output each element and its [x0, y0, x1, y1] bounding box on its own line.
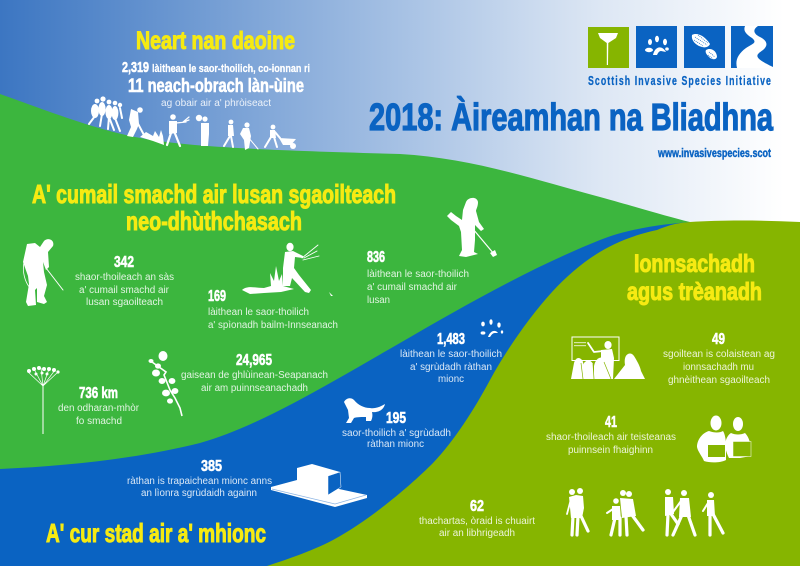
text: 62 events: thachartas, òraid is chuairt — [419, 516, 535, 527]
icon: giant hogweed — [27, 366, 60, 434]
text: 836 days: làithean le saor-thoilich — [367, 269, 469, 280]
text: 342 volunteers — [75, 254, 174, 308]
text: 385 rafts and traps: ràthan is trapaichean mionc anns — [127, 476, 272, 487]
text: 195 volunteers: 195 — [386, 410, 406, 427]
text: 41 certificates: shaor-thoileach air teisteanas — [546, 432, 676, 443]
heading: Neart nan daoine: Neart nan daoine — [136, 27, 295, 55]
panel: blue mink band — [0, 222, 690, 566]
logo tile: paw — [636, 26, 677, 68]
text: working on project: ag obair air a' phròiseact — [161, 98, 271, 109]
text: 836 days: a' cumail smachd air — [367, 282, 458, 293]
icon: knotweed sprig — [148, 351, 182, 416]
text: 49 schools: 49 — [712, 331, 725, 348]
text: 342 volunteers: shaor-thoileach an sàs — [75, 272, 174, 283]
logo: Scottish Invasive Species Initiative — [588, 26, 773, 88]
text: 836 days — [367, 249, 469, 306]
text: 62 events: air an libhrigeadh — [439, 528, 515, 539]
heading: controlling invasive plants — [32, 179, 396, 236]
text: 736 km: den odharan-mhòr — [58, 403, 140, 414]
text: 41 certificates — [546, 414, 676, 456]
text: 736 km: fo smachd — [76, 416, 122, 427]
text: 342 volunteers: lusan sgaoilteach — [86, 297, 163, 308]
text: 62 events — [419, 498, 535, 539]
text: 1,483 days: 1,483 — [437, 331, 465, 348]
text: 24,965 stems: air am puinnseanachadh — [201, 383, 308, 394]
heading: learning and training: agus trèanadh — [627, 278, 762, 306]
text: full-time staff equivalent: 11 neach-obrach làn-ùine — [128, 76, 304, 97]
text: 169 balsam days: 169 — [208, 288, 226, 305]
text: 1,483 days: mionc — [438, 374, 464, 385]
text: 62 events: 62 — [470, 498, 484, 515]
text: 41 certificates: puinnsein fhaighinn — [568, 445, 653, 456]
text: 49 schools: ionnsachadh mu — [683, 362, 754, 373]
icon: walking groups — [567, 488, 723, 535]
text: 836 days: lusan — [367, 295, 390, 306]
heading: stopping the mink: A' cur stad air a' mhionc — [46, 518, 266, 548]
logo tile: river — [731, 26, 773, 68]
text: 1,483 days: a' sgrùdadh ràthan — [410, 362, 492, 373]
text: 24,965 stems: 24,965 — [236, 352, 272, 369]
text: 195 volunteers: ràthan mionc — [367, 439, 424, 450]
icon: strimmer worker — [447, 198, 497, 257]
text: 195 volunteers: saor-thoilich a' sgrùdadh — [342, 428, 451, 439]
text: 24,965 stems: gaisean de ghlùinean-Seapanach — [181, 370, 328, 381]
text: 1,483 days: làithean le saor-thoilich — [400, 349, 502, 360]
text: 49 schools — [663, 331, 775, 386]
panel: green invasive plants hill — [0, 94, 690, 566]
icon: row of volunteers on hill — [89, 96, 296, 150]
text: 41 certificates: 41 — [605, 414, 617, 431]
logo tile: boot print — [684, 26, 725, 68]
text: 385 rafts and traps — [127, 458, 272, 499]
text: 836 days: 836 — [367, 249, 385, 266]
text: volunteer days — [122, 59, 310, 76]
icon: paw print — [481, 319, 503, 337]
icon: mink raft and trap — [271, 464, 367, 507]
text: 24,965 stems — [181, 352, 328, 394]
text: volunteer days: 2,319 — [122, 59, 149, 76]
icon: two people with certificates — [697, 416, 751, 462]
icon: classroom — [571, 337, 645, 379]
icon: sprayer — [23, 239, 63, 306]
panel: olive learning area — [267, 220, 800, 566]
heading: controlling invasive plants: neo-dhùthchasach — [126, 206, 302, 236]
text: volunteer days: làithean le saor-thoilich, co-ionnan ri — [152, 63, 310, 75]
heading: learning and training: Ionnsachadh — [634, 250, 755, 278]
text: 169 balsam days: làithean le saor-thoilich — [208, 307, 309, 318]
text: 736 km: 736 km — [79, 385, 118, 402]
text: 1,483 days — [400, 331, 502, 385]
text: 385 rafts and traps: 385 — [201, 458, 222, 475]
heading: controlling invasive plants: A' cumail smachd air lusan sgaoilteach — [32, 179, 396, 209]
text: 195 volunteers — [342, 410, 451, 450]
heading: learning and training — [627, 250, 762, 306]
text: 49 schools: ghnèithean sgaoilteach — [668, 375, 770, 386]
text: 342 volunteers: a' cumail smachd air — [79, 285, 170, 296]
text: 49 schools: sgoiltean is colaistean ag — [663, 349, 775, 360]
text: 169 balsam days — [208, 288, 338, 331]
text: 385 rafts and traps: an lìonra sgrùdaidh againn — [141, 488, 257, 499]
text: 736 km — [58, 385, 140, 427]
icon: mink — [344, 398, 385, 423]
icon: person pulling balsam — [242, 243, 333, 296]
text: 169 balsam days: a' spìonadh bailm-Innseanach — [208, 320, 338, 331]
text: 342 volunteers: 342 — [114, 254, 134, 271]
logo tile: hogweed — [588, 27, 629, 68]
